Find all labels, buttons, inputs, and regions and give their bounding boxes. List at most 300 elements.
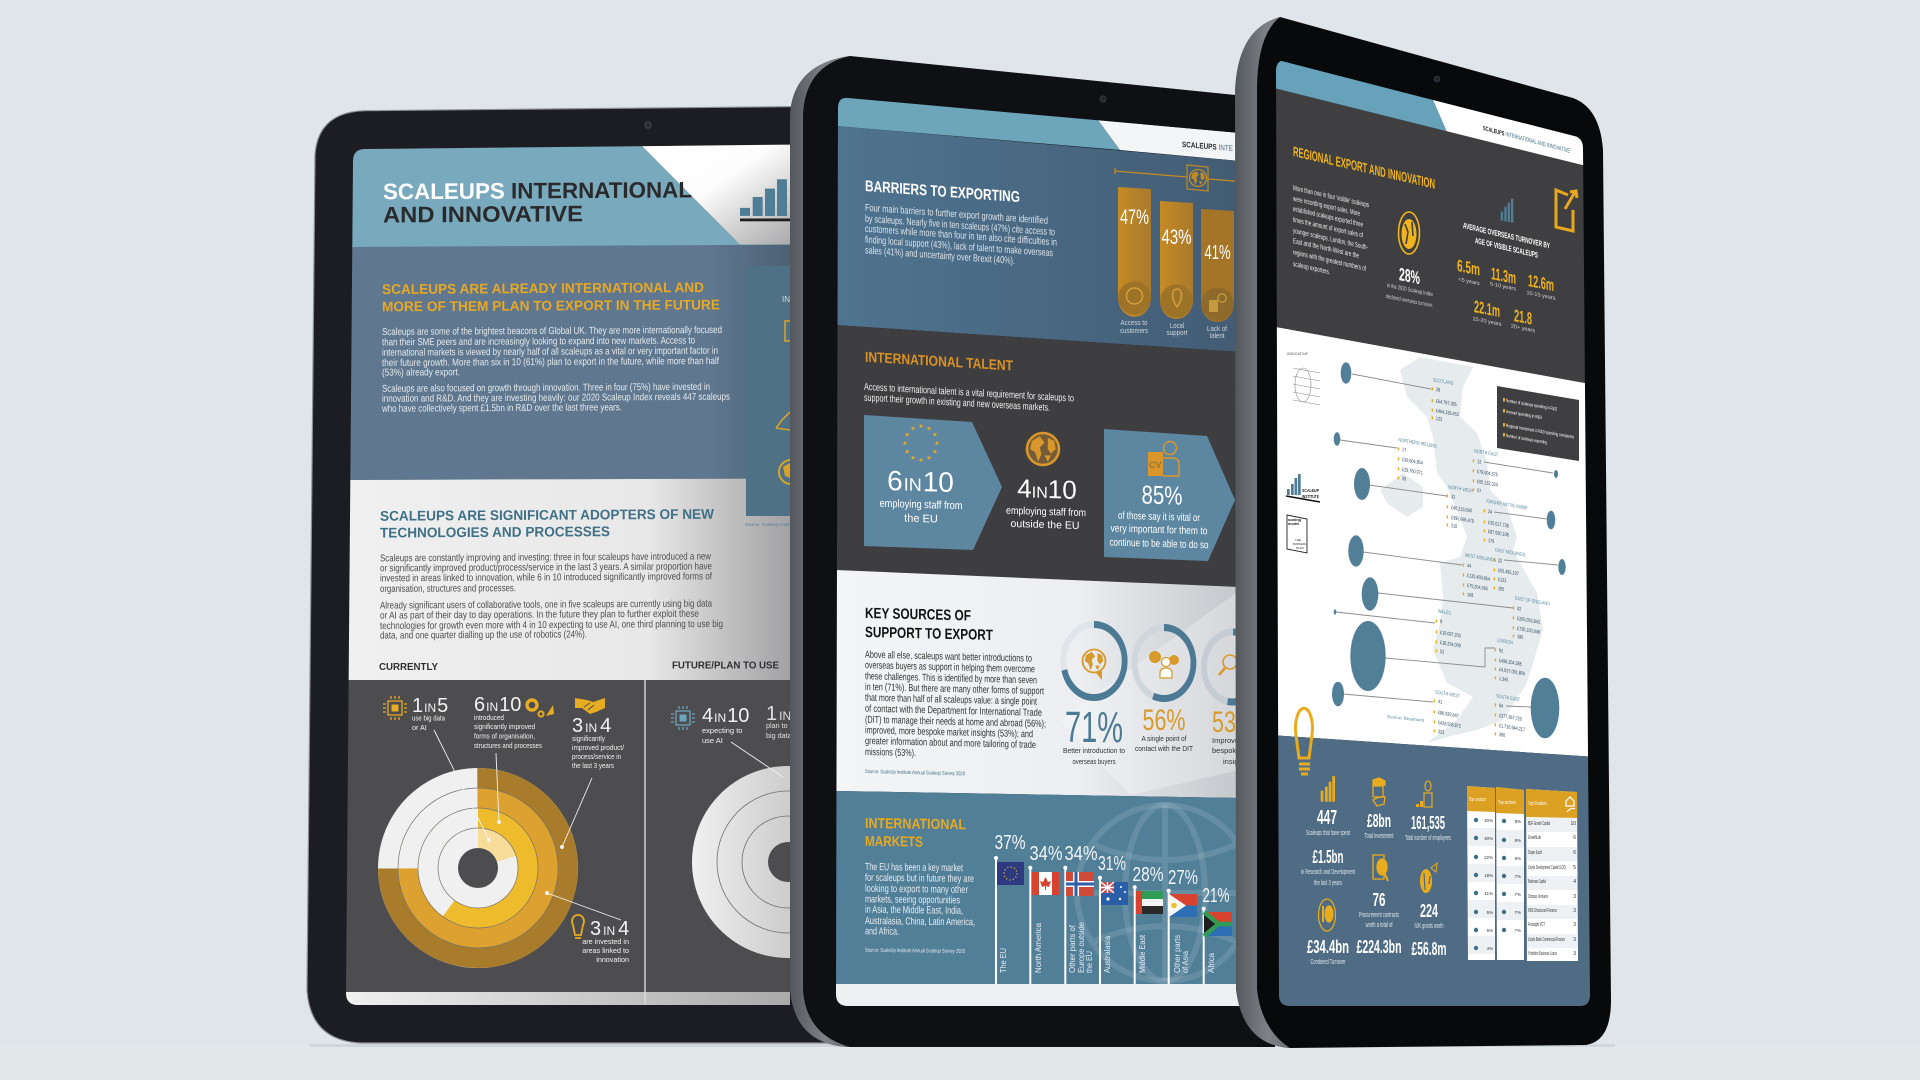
region: North East: NORTH EAST <box>1474 448 1498 458</box>
panel: middle tablet <box>790 56 1275 1047</box>
header white wedge <box>1433 100 1590 167</box>
table: top sectors two: Top sectors <box>1498 800 1516 806</box>
text: adopters paragraphs: Scaleups are constantly improving and investing: three in four scaleups have introduced a new <box>380 551 712 564</box>
table: top funders: 10 <box>1570 821 1576 827</box>
chart: barrier bar 41%: Lack of <box>1207 324 1228 333</box>
map: region bubbles <box>1332 362 1566 738</box>
stat: 3 in 4 innovation: 3IN4 <box>590 918 629 940</box>
region: Wales <box>1436 608 1461 658</box>
region: South East: SOUTH EAST <box>1496 693 1520 703</box>
stat: 3 in 4 product: process/service in <box>572 752 621 761</box>
label: future plan to use: FUTURE/PLAN TO USE <box>672 660 779 672</box>
region: North West: NORTH WEST <box>1448 484 1473 494</box>
text: intro paragraphs <box>381 325 730 415</box>
text: talent intro: Access to international talent is a vital requirement for scaleups to <box>864 382 1074 404</box>
map: UK silhouette <box>1380 357 1543 743</box>
stat: 4 in 10 future: use AI <box>702 736 723 745</box>
stat: 22.1m <box>1472 296 1502 328</box>
stat: 85%: very important for them to <box>1110 523 1208 537</box>
text: regional paragraph: East and the North-West are the <box>1293 236 1359 260</box>
chart: barrier bar 47%: customers <box>1120 326 1148 335</box>
region: Wales: 9 <box>1440 618 1442 625</box>
text: markets paragraph <box>865 862 975 939</box>
stat: 161,535: Total number of employees <box>1405 835 1451 842</box>
screen left <box>346 144 790 1005</box>
text: barriers paragraph: sales (41%) and uncertainty over Brexit (40%). <box>865 245 1015 267</box>
icon: document and magnifier <box>1373 855 1388 881</box>
chart: barrier bar 47%: Access to <box>1120 318 1148 327</box>
logo: book <box>1287 515 1307 553</box>
stat: 161,535 <box>1405 813 1451 842</box>
region: East Midlands: 195 <box>1498 585 1505 592</box>
text: regional paragraph: regions with the greatest numbers of <box>1293 247 1367 273</box>
stat: 12.6m: 10-15 years <box>1526 290 1556 302</box>
panel: partial inset teal: Source: ScaleUp Institute <box>745 522 796 527</box>
chart: market labels: of Asia <box>1181 950 1190 973</box>
text: adopters paragraphs: Already significant users of collaborative tools, one in five scaleups are currently using big data <box>380 599 712 612</box>
logo: book: PLAN <box>1296 546 1304 550</box>
stat: 11.3m: 11.3m <box>1491 263 1516 288</box>
icon: magnifier <box>1219 655 1237 675</box>
region: North West <box>1447 484 1474 532</box>
stat: £1.5bn <box>1301 847 1355 887</box>
region: Yorkshire: £87,930,108 <box>1488 528 1509 538</box>
region: London: 1,345 <box>1499 675 1509 683</box>
stat: £224.3bn: £224.3bn <box>1356 937 1402 957</box>
camera right <box>1434 76 1440 82</box>
icon: CV person: CV <box>1149 460 1162 470</box>
stat: 85%: continue to be able to do so <box>1110 536 1209 551</box>
stat: 21.8: 21.8 <box>1514 305 1532 329</box>
panel: slate intro <box>346 245 790 480</box>
text: barriers paragraph: finding local support (43%), lack of talent to make overseas <box>865 235 1053 259</box>
text: adopters paragraphs <box>380 551 723 642</box>
stat: 447 <box>1306 776 1350 837</box>
stat: £1.5bn: the last 3 years <box>1314 880 1342 887</box>
table: top sectors one: 40% <box>1484 818 1493 823</box>
chart: market percentages: 34% <box>1030 843 1063 865</box>
map: legend: Number of scaleups spending in R&D <box>1506 398 1557 413</box>
chart: market labels: Europe outside <box>1077 921 1086 973</box>
map: legend: Number of scaleups exporting <box>1506 433 1547 446</box>
chart: market percentages: 37% <box>994 832 1026 854</box>
region: South East: 84 <box>1499 702 1504 709</box>
text: intro paragraphs: Scaleups are also focused on growth through innovation. Three in four (75%) have invested in <box>382 382 710 395</box>
text: regional paragraph <box>1292 183 1369 285</box>
table: top sectors one: Top sectors <box>1469 797 1486 803</box>
table: top sectors one: 22% <box>1484 855 1493 860</box>
region: North East: £55,132,324 <box>1477 478 1498 488</box>
stat: 4 in 10: 4IN10 <box>1017 473 1077 505</box>
stat: 3 in 4 innovation: innovation <box>596 955 629 964</box>
stat: 11.3m: 5-10 years <box>1490 281 1516 293</box>
stat: £8bn: £8bn <box>1367 811 1391 831</box>
region: West Midlands: WEST MIDLANDS <box>1465 552 1496 563</box>
icon: globe with orbit <box>1398 212 1420 254</box>
text: adopters paragraphs: invested in areas linked to innovation, while 6 in 10 introduced significantly improved forms of <box>380 571 712 584</box>
chart: barrier bar 43% <box>1160 201 1193 337</box>
chart: market percentages: 21% <box>1202 885 1230 907</box>
reflection in white section <box>1060 590 1240 795</box>
chart: barrier bar 43%: 43% <box>1162 226 1192 249</box>
table: top funders: Yorkshire Business Loans <box>1528 951 1557 957</box>
region: North East: 57 <box>1477 487 1482 494</box>
stat: 3 in 4 innovation: are invested in <box>582 937 629 946</box>
text: key sources paragraph: these challenges. This is identified by more than seven <box>865 671 1037 686</box>
table: top funders: Bodeman Capital <box>1528 879 1546 885</box>
panel: international talent <box>836 325 1240 587</box>
chart: 56% donut <box>1135 628 1193 698</box>
stat: 6 in 10 <box>474 694 542 750</box>
title: AND INNOVATIVE <box>383 201 583 227</box>
region: London: £498,204,285 <box>1499 657 1522 667</box>
icon: header bars <box>740 179 790 221</box>
text: markets paragraph: The EU has been a key market <box>865 862 963 874</box>
flag: Norway <box>1066 872 1094 896</box>
chart: market labels: Other parts of <box>1068 924 1077 973</box>
stat: 22.1m: 15-20 years <box>1472 316 1502 328</box>
text: regional paragraph: scaleup exporters. <box>1293 259 1330 276</box>
table: top funders: 6 <box>1573 835 1576 841</box>
footer strip <box>346 992 790 1005</box>
stat: 6.5m <box>1457 255 1480 287</box>
region: East Midlands: EAST MIDLANDS <box>1495 547 1525 558</box>
heading: significant adopters: SCALEUPS ARE SIGNIFICANT ADOPTERS OF NEW <box>380 506 715 524</box>
heading: key sources <box>865 605 993 644</box>
table: top sectors two: 8% <box>1515 856 1521 861</box>
stat: 224: 224 <box>1420 901 1438 921</box>
chart: barrier bar 41% <box>1201 209 1234 340</box>
stat: 71%: 71% <box>1065 703 1123 752</box>
text: adopters paragraphs: technologies for growth even more with 4 in 10 expecting to use AI, one third planning to use big <box>380 619 723 632</box>
panel: partial inset teal: IN <box>782 295 790 304</box>
stat: 1 in 3 future clipped: big data <box>766 731 792 740</box>
stat: 6 in 10: forms of organisation, <box>474 732 535 740</box>
text: barriers paragraph: by scaleups. Nearly five in ten scaleups (47%) cite access to <box>865 214 1055 238</box>
region: London: LONDON <box>1497 637 1513 645</box>
stat: 1 in 3 future clipped: plan to use <box>766 721 801 730</box>
table: top sectors one <box>1467 786 1495 960</box>
text: intro paragraphs: innovation and R&D. And they are investing heavily: our 2020 Scaleup Index reveals 447 scaleups <box>382 392 730 405</box>
map: legend: Regional Investment in R&D spending companies <box>1506 423 1574 441</box>
region: Scotland <box>1432 377 1459 425</box>
text: key sources paragraph: greater information about and more tailoring of trade <box>865 736 1036 751</box>
stat: 4 in 10 future: 4IN10 <box>702 705 749 727</box>
icon: big bulb <box>1295 708 1312 774</box>
region: Northern Ireland: £36,604,854 <box>1402 456 1423 466</box>
text: intro paragraphs: who have collectively spent £1.5bn in R&D over the last three years. <box>381 402 622 415</box>
text: markets paragraph: for scaleups but in future they are <box>865 873 974 885</box>
region: East of England: EAST OF ENGLAND <box>1515 595 1551 607</box>
heading: turnover: AGE OF VISIBLE SCALEUPS <box>1475 236 1538 260</box>
region: London: 92 <box>1499 647 1504 654</box>
icon: coins <box>1318 899 1336 931</box>
text: adopters paragraphs: or significantly improved product/process/service in the last 3 years. A similar proportion have <box>380 561 712 574</box>
text: markets copy <box>865 816 975 955</box>
stat: 53%: insights <box>1223 757 1249 766</box>
chart: market labels: North America <box>1034 922 1043 973</box>
stat: £34.4bn <box>1307 937 1349 966</box>
callout leader lines <box>434 730 783 920</box>
table: top funders: 6 <box>1573 850 1576 856</box>
stat: 1 in 3 future clipped <box>766 706 790 740</box>
heading: already international <box>382 282 720 312</box>
stat: 53%: Improved more <box>1212 736 1262 745</box>
table: top sectors one: 11% <box>1485 891 1493 896</box>
chart: market percentages <box>994 832 1230 907</box>
heading: barriers: BARRIERS TO EXPORTING <box>865 178 1020 206</box>
flag: UAE <box>1136 891 1163 914</box>
flag: South Africa <box>1204 912 1232 936</box>
stat: 76 <box>1359 890 1399 929</box>
chart: market labels: Middle East <box>1138 934 1147 973</box>
stat: 85%: 85% <box>1142 479 1183 511</box>
text: key sources paragraph: Above all else, scaleups want better introductions to <box>865 650 1032 665</box>
stat: 56%: A single point of <box>1142 734 1187 743</box>
table: top funders: GrowthLab <box>1528 835 1541 841</box>
stat: 6 in 10: structures and processes <box>474 741 542 750</box>
stat: 6 in 10: employing staff from <box>880 498 963 512</box>
region: South East: £377,367,720 <box>1499 712 1522 722</box>
region: London <box>1495 637 1525 686</box>
stat: 85%: of those say it is vital or <box>1118 510 1200 524</box>
region: West Midlands <box>1463 552 1496 602</box>
region: East Midlands: £55,495,107 <box>1498 567 1519 577</box>
screen right <box>1270 58 1595 1010</box>
panel: map <box>1270 326 1595 757</box>
table: top funders: Octopus Ventures <box>1528 894 1548 900</box>
table: top funders: 3 <box>1573 894 1576 900</box>
stat: 56% <box>1135 704 1193 753</box>
stat: 1 in 5 <box>412 698 448 730</box>
chart: market labels: Other parts <box>1173 935 1182 973</box>
table: top sectors one: 40% <box>1484 836 1493 841</box>
stat: 3 in 4 innovation <box>582 921 629 962</box>
stat: 28%: 28% <box>1399 264 1420 288</box>
region: Yorkshire: £35,017,728 <box>1488 519 1509 529</box>
icon: people <box>1149 651 1179 678</box>
text: key sources copy <box>865 605 1046 779</box>
label: currently: CURRENTLY <box>379 661 438 673</box>
flag: EU <box>997 862 1024 885</box>
stat: 76: Procurement contracts <box>1359 912 1399 919</box>
text: barriers paragraph <box>865 203 1057 270</box>
region: West Midlands: 168 <box>1467 591 1474 598</box>
stat: 447: 447 <box>1317 807 1337 829</box>
stat: £1.5bn: in Research and Development <box>1301 869 1355 876</box>
chart: barrier bar 47%: 47% <box>1120 206 1149 229</box>
text: key sources paragraph: improved, more bespoke market insights (53%); and <box>865 725 1033 740</box>
table: top funders: 3 <box>1573 951 1576 957</box>
text: adopters paragraphs: organisation, structures and processes. <box>380 583 516 595</box>
region: South East: £1,716,944,217 <box>1499 722 1525 733</box>
table: top sectors two <box>1496 787 1524 960</box>
stat: 71%: Better introduction to <box>1063 746 1125 755</box>
table: top funders: Draper Esprit <box>1528 850 1542 856</box>
region: East of England: 186 <box>1517 633 1524 640</box>
region: Yorkshire <box>1484 498 1528 550</box>
tablet body right <box>1236 17 1611 1048</box>
heading: turnover: AVERAGE OVERSEAS TURNOVER BY <box>1463 221 1550 251</box>
panel: slate totals <box>1270 735 1595 1010</box>
stat: £8bn <box>1364 811 1394 840</box>
stat: £56.8m: £56.8m <box>1412 939 1446 959</box>
region: East Midlands: £123 <box>1498 576 1507 584</box>
chart: market percentages: 28% <box>1132 864 1164 886</box>
chart: current usage rings <box>378 768 578 968</box>
icon: bulb <box>572 915 584 938</box>
region: North East: £79,504,575 <box>1477 468 1498 478</box>
chart: market percentages: 31% <box>1098 853 1126 875</box>
icon: blue bars <box>1501 199 1513 223</box>
stat: 28% <box>1386 262 1433 309</box>
chart: market labels: Australasia <box>1103 935 1112 973</box>
heading: markets: INTERNATIONAL <box>865 816 966 833</box>
table: top sectors two: 8% <box>1515 819 1521 824</box>
region: South West: 41 <box>1438 698 1443 705</box>
stat: 6 in 10: introduced <box>474 713 504 722</box>
stat: 53%: 53% <box>1212 706 1255 739</box>
text: key sources paragraph: (DIT) to manage their needs at home and abroad (56%); <box>865 715 1046 730</box>
table: top sectors one: 4% <box>1487 946 1493 951</box>
panel: key sources <box>836 570 1240 798</box>
stat: 447: Scaleups that have spent <box>1306 830 1350 837</box>
region: Wales: £18,254,009 <box>1440 639 1461 649</box>
stat: 3 in 4 product: 3IN4 <box>572 715 611 737</box>
logo: book: model <box>1288 522 1299 526</box>
stat: 3 in 4 product: improved product/ <box>572 743 624 752</box>
region: East of England: 42 <box>1517 605 1522 612</box>
stat: 6 in 10 <box>880 465 962 526</box>
camera left <box>645 122 651 128</box>
region: Scotland: £464,339,452 <box>1436 408 1459 417</box>
panel: left tablet <box>307 106 884 1043</box>
stat: 3 in 4 product <box>572 715 624 770</box>
map: source note: Source: Beauhurst <box>1387 714 1425 723</box>
chart: market labels: Africa <box>1207 952 1216 973</box>
stat: 56%: contact with the DIT <box>1135 744 1193 753</box>
table: top sectors two: 7% <box>1515 892 1521 897</box>
divider <box>644 680 646 1005</box>
text: barriers paragraph: Four main barriers to further export growth are identified <box>865 203 1048 227</box>
stat: 1 in 5: or AI <box>412 723 427 732</box>
panel: partial inset teal <box>745 266 790 527</box>
floor shadow <box>0 1044 1920 1080</box>
stat: 4 in 10 <box>1006 473 1086 532</box>
stat: 1 in 5: 1IN5 <box>412 695 448 717</box>
table: top sectors two: 7% <box>1515 928 1521 933</box>
text: intro paragraphs: international markets is viewed by nearly half of all scaleups as a vital or very important factor in <box>382 346 718 359</box>
heading: key sources: SUPPORT TO EXPORT <box>865 624 993 644</box>
region: East of England: £720,103,948 <box>1517 625 1540 635</box>
stat: 4 in 10: employing staff from <box>1006 505 1086 519</box>
region: Scotland: 123 <box>1436 415 1443 422</box>
region: East Midlands: 22 <box>1498 557 1503 564</box>
table: top funders: Lloyds Development Capital (LDC) <box>1528 865 1566 871</box>
stat: 6 in 10: significantly improved <box>474 722 535 731</box>
heading: significant adopters <box>380 509 714 538</box>
stat: 6.5m: <5 years <box>1458 277 1480 287</box>
heading: international talent: INTERNATIONAL TALENT <box>865 350 1013 375</box>
stat: 71% <box>1063 703 1125 766</box>
stat: £34.4bn: £34.4bn <box>1307 937 1349 957</box>
camera middle <box>1100 96 1106 102</box>
stat: 4 in 10: outside the EU <box>1011 518 1079 532</box>
region: Wales: WALES <box>1438 608 1451 616</box>
text: adopters paragraphs: data, and one quarter dialling up the use of robotics (24%). <box>380 629 587 642</box>
stat: 6 in 10: 6IN10 <box>474 694 521 716</box>
panel: barriers <box>836 126 1240 352</box>
icon: chip gold <box>383 696 407 720</box>
text: talent intro <box>864 382 1074 415</box>
region: North West: £395,665,479 <box>1451 514 1474 524</box>
tablet metal edge right <box>1235 17 1290 1048</box>
region: East of England: £205,053,843 <box>1517 615 1540 625</box>
stat: £1.5bn: £1.5bn <box>1312 847 1344 867</box>
stat: 53% <box>1212 706 1266 766</box>
heading: significant adopters: TECHNOLOGIES AND PROCESSES <box>380 523 610 540</box>
region: Northern Ireland: £29,760,071 <box>1402 466 1423 476</box>
tablet body middle <box>790 56 1275 1047</box>
icon: globe <box>1027 433 1059 465</box>
tablet metal edge middle <box>790 56 850 1047</box>
heading: key sources: KEY SOURCES OF <box>865 605 971 625</box>
chart: 71% donut <box>1063 624 1125 698</box>
table: top funders: BGF Growth Capital <box>1528 821 1550 827</box>
text: adopters paragraphs: or AI as part of their day to day operations. In the future they plan to further exploit these <box>380 609 699 622</box>
logo: book: scaling <box>1288 518 1302 522</box>
table: top sectors one: 5% <box>1487 910 1493 915</box>
map: legend: Amount spending in R&D <box>1506 409 1542 421</box>
text: barriers paragraph: customers while more than four in ten also cite difficulties in <box>865 224 1057 249</box>
icon: handshake <box>575 698 605 714</box>
region: South West: SOUTH WEST <box>1435 689 1460 699</box>
table: top sectors one: 5% <box>1487 928 1493 933</box>
heading: already international: MORE OF THEM PLAN TO EXPORT IN THE FUTURE <box>382 296 720 314</box>
logo: book: BUSINESS <box>1293 542 1306 546</box>
icon: EU stars <box>903 424 939 462</box>
region: Yorkshire: 24 <box>1488 508 1493 515</box>
chart: market percentages: 34% <box>1064 843 1098 865</box>
panel: regional export <box>1270 87 1590 384</box>
stat: 53%: bespoke market <box>1212 746 1266 755</box>
region: South West <box>1434 689 1461 738</box>
stat: 28%: declared overseas turnover. <box>1386 294 1433 309</box>
stat: 4 in 10 future <box>702 708 749 743</box>
icon: person with bars <box>1416 781 1432 807</box>
source note: Source: ScaleUp Institute Annual Scaleup Survey 2020 <box>865 948 965 955</box>
header band <box>1270 58 1447 132</box>
chart: 53% donut <box>1204 632 1262 702</box>
flag: Canada <box>1032 872 1059 895</box>
panel: right tablet <box>1235 17 1611 1048</box>
chart: market percentages: 27% <box>1168 867 1198 889</box>
region: East Midlands <box>1494 547 1525 596</box>
footer strip <box>836 984 1240 1006</box>
region: West Midlands: 44 <box>1467 562 1472 569</box>
map: leader lines <box>1336 374 1558 707</box>
stat: 224 <box>1414 901 1444 930</box>
region: South East: 390 <box>1499 731 1506 738</box>
text: intro paragraphs: their future growth. More than six in 10 (61%) plan to export in the future, while more than half <box>382 356 719 369</box>
region: South West: £86,920,647 <box>1438 709 1459 719</box>
stat: 56%: 56% <box>1142 704 1186 737</box>
header text: SCALEUPS INTE <box>1182 140 1233 153</box>
icon: export arrow box <box>1556 190 1577 231</box>
watermark: globe <box>1077 805 1253 981</box>
region: North West: 32 <box>1451 493 1456 500</box>
table: top funders: 5 <box>1573 865 1576 871</box>
